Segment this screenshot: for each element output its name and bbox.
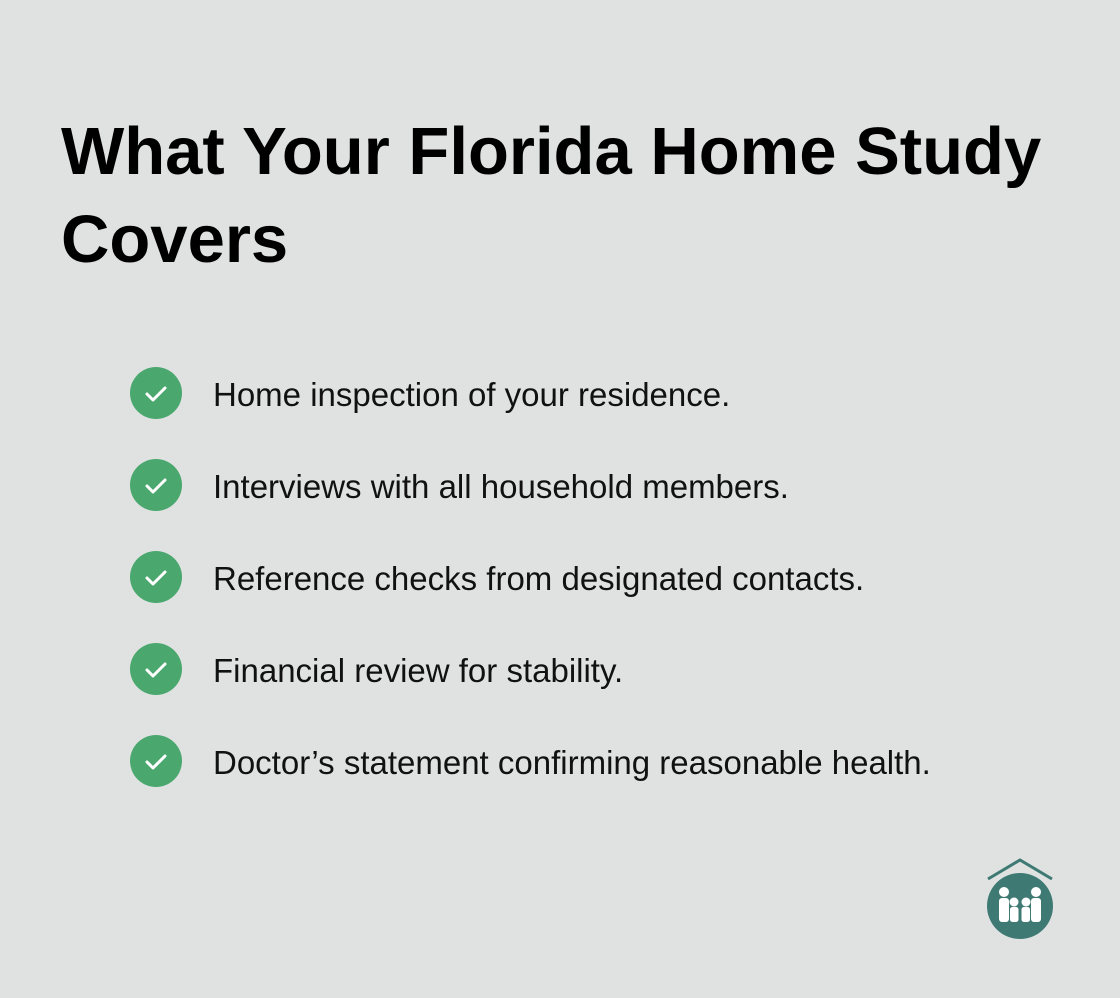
item 3: [130, 551, 864, 603]
item 5: Doctor’s statement confirming reasonable health.: [213, 744, 931, 781]
item 4: Financial review for stability.: [213, 652, 623, 689]
item 1: Home inspection of your residence.: [213, 376, 730, 413]
item 1: [130, 367, 730, 419]
logo: [987, 858, 1053, 939]
item 2: Interviews with all household members.: [213, 468, 789, 505]
title: What Your Florida Home Study Covers: [61, 114, 1041, 277]
item 3: Reference checks from designated contacts.: [213, 560, 864, 597]
item 5: [130, 735, 931, 787]
item 4: [130, 643, 623, 695]
item 2: [130, 459, 789, 511]
